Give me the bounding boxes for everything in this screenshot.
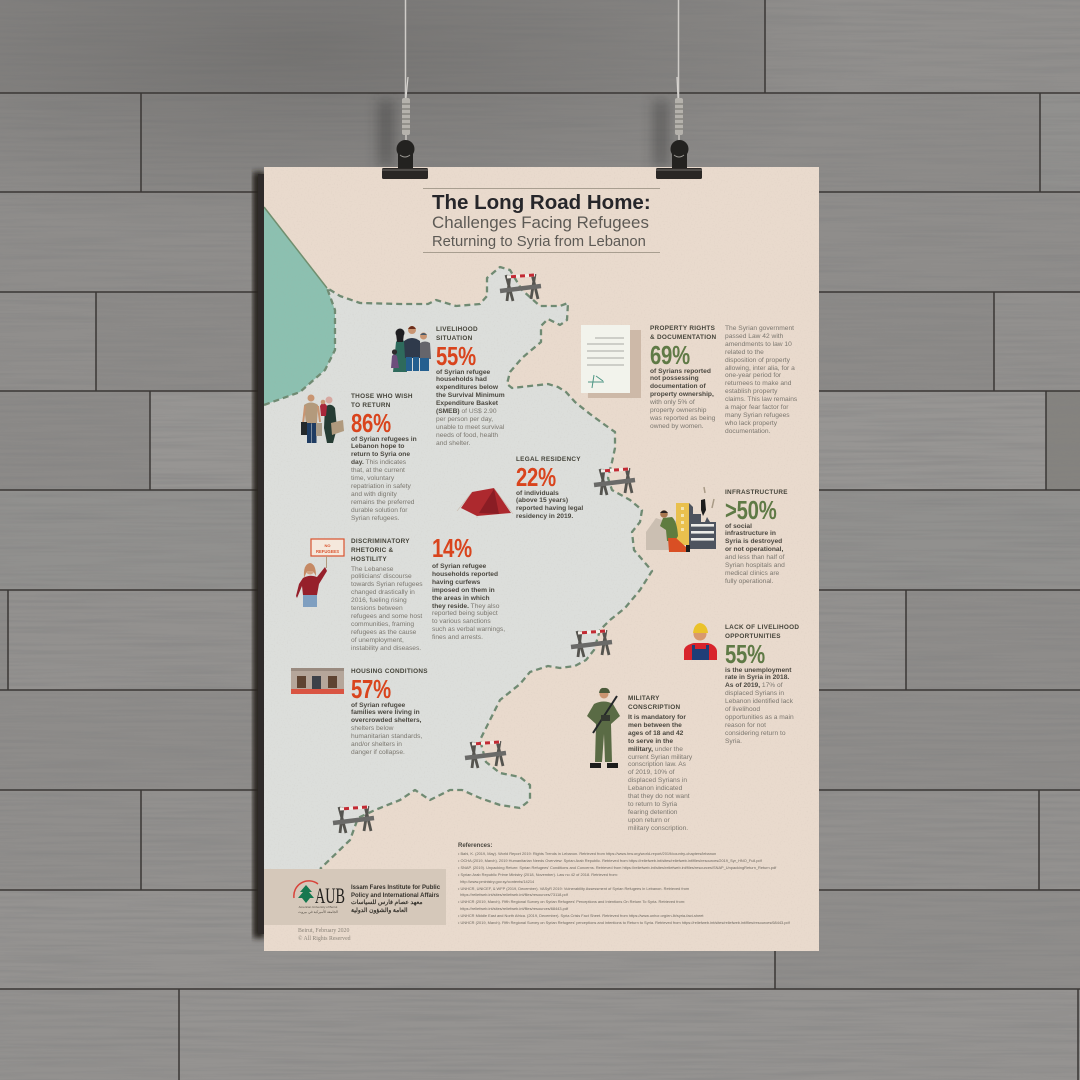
subtitle line two: Returning to Syria from Lebanon [432,234,646,250]
hanger: left clip and wire [382,0,428,179]
text: discriminatory rhetoric and hostility: instability and diseases. [351,645,421,652]
map: coastline [264,207,327,288]
text: law 42 note: many Syrian refugees [725,412,790,419]
text: livelihood situation: unable to meet survival [436,424,504,431]
poster [264,167,819,951]
barricade: central border [571,630,612,657]
text: law 42 note: establish property [725,388,777,395]
text: lack of livelihood opportunities: opportunities as a main [725,714,794,721]
text: those who wish to return: day. This indicates [351,459,406,466]
paper speckle texture [264,167,819,951]
text: livelihood situation: 55% [436,340,476,370]
subtitle line one: Challenges Facing Refugees [432,213,649,232]
text: legal residency: of individuals [516,490,559,496]
text: military conscription: military, under the [628,746,683,753]
text: housing conditions: HOUSING CONDITIONS [351,668,428,674]
text: legal residency: 22% [516,462,556,492]
text: livelihood situation: households had [436,376,487,383]
footer: institute name: معهد عصام فارس للسياسات [351,900,423,906]
text: military conscription: of 2019, 10% of [628,769,675,776]
text: military conscription: upon return or [628,817,670,824]
text: property rights and documentation: PROPERTY RIGHTS [650,324,715,332]
text: infrastructure: >50% [725,494,777,524]
text: references: • UNHCR (2019, March). Fifth Regional Survey on Syrian Refugees' Perceptions and Intentions On Return To Syria. Retrieved from: [458,899,685,904]
text: property rights and documentation: not possessing [650,375,699,382]
icon: red tent [457,488,513,518]
footer: date and rights: © All Rights Reserved [298,936,351,942]
text: discriminatory rhetoric and hostility: of unemployment, [351,637,404,644]
text: those who wish to return: THOSE WHO WISH [351,392,413,400]
text: those who wish to return: durable solution for [351,507,407,514]
text: livelihood situation: needs of food, health [436,432,498,439]
footer: institute name: Issam Fares Institute for Public [351,885,440,891]
logo: AUB cedar: AUB [315,883,345,908]
text: references: • UNHCR (2019, March). Fifth Regional Survey on Syrian Refugees' perceptions and intentions to Return to Syria. Retrieved from https://reliefweb.int/sites/reliefweb.int/files/resources/68443.pdf [458,920,790,925]
text: military conscription: ages of 18 and 42 [628,730,683,737]
text: those who wish to return: that, at the current [351,467,405,474]
text: livelihood situation: per person per day, [436,416,493,423]
text: lack of livelihood opportunities: Lebanon identified lack [725,698,793,705]
icon: protester with sign: REFUGEES [316,549,339,554]
text: livelihood situation: Expenditure Basket [436,400,498,407]
text: property rights and documentation: documentation of [650,383,706,390]
text: discriminatory rhetoric and hostility: changed drastically in [351,589,415,596]
text: lack of livelihood opportunities: of livelihood [725,706,760,713]
text: infrastructure [725,488,788,585]
text: references: http://www.pministry.gov.sy/contents/14214 [460,879,534,884]
text: law 42 note: The Syrian government [725,325,794,332]
text: lack of livelihood opportunities: OPPORTUNITIES [725,632,781,640]
text: lack of livelihood opportunities: displaced Syrians in [725,690,784,697]
text: law 42 note: who lack property [725,420,777,427]
footer: institute name: Policy and International Affairs [351,893,439,899]
text: lack of livelihood opportunities: rate in Syria in 2018. [725,674,789,681]
text: livelihood situation: (SMEB) of US$ 2.90 [436,408,497,415]
text: legal residency [516,456,583,520]
text: military conscription: to return to Syria [628,801,677,808]
text: references: • OCHA (2019, March). 2019 Humanitarian Needs Overview: Syrian Arab Republic. Retrieved from https://reliefweb.int/sites/reliefweb.int/files/resources/2019_Syr_HNO_Full.pdf [458,858,762,863]
text: infrastructure: INFRASTRUCTURE [725,488,788,496]
text: military conscription: conscription law. As [628,761,686,768]
text: law 42 note: a major fear factor for [725,404,788,411]
text: military conscription [628,694,692,832]
text: those who wish to return: of Syrian refugees in [351,436,417,442]
text: curfews: having curfews [432,579,480,586]
icon: house [291,668,344,694]
text: law 42 note: related to the [725,349,764,356]
text: military conscription: Lebanon indicated [628,785,682,792]
text: lack of livelihood opportunities: LACK OF LIVELIHOOD [725,624,799,630]
text: livelihood situation: of Syrian refugee [436,368,490,376]
text: military conscription: CONSCRIPTION [628,704,680,710]
text: infrastructure: and less than half of [725,554,784,561]
footer: date and rights: Beirut, February 2020 [298,928,349,934]
text: discriminatory rhetoric and hostility: The Lebanese [351,566,393,572]
logo: AUB cedar: American University of Beirut [299,905,338,909]
icon: family [391,326,431,372]
map and illustrations [264,206,717,925]
text: curfews: to various sanctions [432,618,491,625]
footer: institute name [351,884,440,914]
logo: AUB cedar: الجامعة الأميركية في بيروت [298,908,338,914]
text: curfews: of Syrian refugee [432,563,486,570]
text: discriminatory rhetoric and hostility: towards Syrian refugees [351,581,423,588]
text: references: • Bahi, K. (2019, May). World Report 2019: Rights Trends in Lebanon. Retrieved from https://www.hrw.org/world-report/2019/country-chapters/lebanon [458,851,716,856]
text: those who wish to return: return to Syria one [351,451,410,458]
text: livelihood situation: the Survival Minimum [436,392,505,399]
map: Lebanon land mass [264,267,652,869]
text: infrastructure: medical clinics are [725,570,779,577]
logo: AUB cedar [294,881,345,914]
text: housing conditions: and/or shelters in [351,741,402,748]
text: references: References: [458,843,492,849]
text: lack of livelihood opportunities: considering return to [725,730,786,737]
text: discriminatory rhetoric and hostility: refugees and some host [351,613,422,620]
text: law 42 note: disposition of property [725,357,790,364]
text: livelihood situation: LIVELIHOOD [436,326,478,332]
text: curfews: fines and arrests. [432,634,483,641]
text: housing conditions: shelters below [351,725,393,732]
text: law 42 note: allowing, inter alia, for a [725,365,795,372]
text: lack of livelihood opportunities: 55% [725,638,765,668]
text: livelihood situation: expenditures below [436,384,498,391]
text: infrastructure: or not operational, [725,546,783,553]
text: military conscription: that they do not want [628,793,690,800]
text: curfews: households reported [432,571,498,578]
text: military conscription: men between the [628,722,682,729]
text: those who wish to return: time, voluntary [351,475,394,482]
text: those who wish to return: Lebanon hope to [351,443,404,450]
text: law 42 note [725,325,797,435]
text: military conscription: displaced Syrians in [628,777,687,784]
barricade: south border [465,741,506,768]
text: law 42 note: returnees to make and [725,380,791,387]
text: law 42 note: amendments to law 10 [725,341,792,348]
hanger: right clip and wire [656,0,702,179]
text: references: • SNAP. (2019). Unpacking Return: Syrian Refugees' Conditions and Concerns. Retrieved from https://reliefweb.int/sites/reliefweb.int/files/resources/SNAP_UnpackingReturn_Return.pdf [458,865,776,870]
text: livelihood situation [436,326,505,447]
text: those who wish to return: TO RETURN [351,402,391,408]
text: those who wish to return: Syrian refugees. [351,515,399,522]
footer band [264,869,446,925]
text: infrastructure: infrastructure in [725,530,776,537]
icon: worker [684,623,717,660]
text: curfews: such as verbal warnings, [432,626,505,633]
text: discriminatory rhetoric and hostility: communities, framing [351,621,414,628]
text: housing conditions: 57% [351,674,391,704]
text: references: https://reliefweb.int/sites/reliefweb.int/files/resources/68443.pdf [460,906,568,911]
text: references [458,842,790,925]
footer: institute name: العامة والشؤون الدولية [351,908,408,914]
text: curfews: the areas in which [432,595,490,602]
text: legal residency: residency in 2019. [516,513,573,520]
text: infrastructure: Syria is destroyed [725,538,782,545]
text: references: • Syrian Arab Republic Prime Ministry (2018, November). Law no 42 of 2018. Retrieved from: [458,872,618,877]
text: infrastructure: fully operational. [725,578,773,585]
text: property rights and documentation: owned by women. [650,423,704,430]
text: housing conditions: overcrowded shelters, [351,717,422,724]
text: property rights and documentation: & DOCUMENTATION [650,334,716,340]
text: curfews [432,533,505,641]
text: military conscription: MILITARY [628,694,660,702]
title: The Long Road Home: [432,191,651,214]
text: curfews: they reside. They also [432,603,499,610]
text: lack of livelihood opportunities: As of 2019, 17% of [725,682,783,689]
text: law 42 note: documentation. [725,428,770,435]
text: housing conditions: humanitarian standards, [351,733,422,740]
text: infrastructure: of social [725,522,752,530]
text: lack of livelihood opportunities: is the unemployment [725,666,791,674]
text: military conscription: military conscription. [628,825,688,832]
text: livelihood situation: and shelter. [436,440,470,447]
text: those who wish to return: and with dignity [351,491,397,498]
text: lack of livelihood opportunities: reason for not [725,722,766,729]
text: discriminatory rhetoric and hostility: 2016, fueling rising [351,597,407,604]
text: legal residency: (above 15 years) [516,497,568,504]
text: discriminatory rhetoric and hostility [351,538,423,652]
text: references: • UNHCR, UNICEF, & WFP (2019, December). VASyR 2019: Vulnerability Assessment of Syrian Refugees in Lebanon. Retrieved from [458,886,689,891]
text: discriminatory rhetoric and hostility: HOSTILITY [351,556,387,562]
text: curfews: imposed on them in [432,587,495,594]
text: law 42 note: claims. This law remains [725,396,797,403]
icon: destroyed infrastructure and worker [646,487,716,552]
text: references: https://reliefweb.int/sites/reliefweb.int/files/resources/73118.pdf [460,892,568,897]
map: sea [264,207,335,405]
text: property rights and documentation: with only 5% of [650,399,695,406]
icon: soldier [587,688,620,768]
text: legal residency: LEGAL RESIDENCY [516,456,581,462]
text: references: • UNHCR Middle East and North Africa. (2019, December). Syria Crisis Fact Sheet. Retrieved from https://www.unhcr.org/en-lb/syria-fact-sheet [458,913,703,918]
text: discriminatory rhetoric and hostility: refugees as the cause [351,629,416,636]
text: discriminatory rhetoric and hostility: tensions between [351,605,403,612]
icon: protester with sign [296,539,344,607]
text: lack of livelihood opportunities: Syria. [725,738,742,745]
text: military conscription: It is mandatory for [628,714,686,721]
text: housing conditions: families were living in [351,709,420,716]
text: property rights and documentation: was reported as being [650,415,715,422]
footer: date and rights [298,928,351,942]
barricade: north border [500,274,541,301]
text: curfews: 14% [432,533,472,563]
text: lack of livelihood opportunities [725,624,799,745]
text: housing conditions [351,668,428,756]
text: livelihood situation: SITUATION [436,334,472,342]
text: law 42 note: one-year period for [725,372,781,379]
text: property rights and documentation: property ownership, [650,391,714,398]
text: discriminatory rhetoric and hostility: DISCRIMINATORY [351,538,410,544]
poster shadow on the wall [253,172,265,938]
text: law 42 note: passed Law 42 with [725,333,783,340]
text: curfews: reported being subject [432,610,498,617]
map: dashed border [264,267,652,869]
text: military conscription: current Syrian military [628,754,692,761]
icon: returning refugees [301,394,344,443]
text: infrastructure: Syrian hospitals and [725,562,785,569]
text: housing conditions: of Syrian refugee [351,702,405,708]
text: those who wish to return: 86% [351,408,391,438]
text: discriminatory rhetoric and hostility: politicians' discourse [351,573,412,580]
title block [423,188,660,253]
text: military conscription: to serve in the [628,738,673,745]
text: property rights and documentation: property ownership [650,407,706,414]
text: property rights and documentation [650,324,716,430]
text: those who wish to return: repatriation in safety [351,483,411,490]
icon: property document [581,325,641,398]
text: those who wish to return: remains the preferred [351,499,414,506]
text: housing conditions: danger if collapse. [351,749,405,756]
text: legal residency: reported having legal [516,505,583,512]
text: property rights and documentation: of Syrians reported [650,368,711,374]
barricade: southwest border [333,806,374,833]
text: military conscription: fearing detention [628,809,677,816]
text: property rights and documentation: 69% [650,340,690,370]
text: discriminatory rhetoric and hostility: RHETORIC & [351,546,393,554]
text: those who wish to return [351,392,417,522]
icon: protester with sign: NO [324,543,330,548]
barricade: east border [594,468,635,495]
